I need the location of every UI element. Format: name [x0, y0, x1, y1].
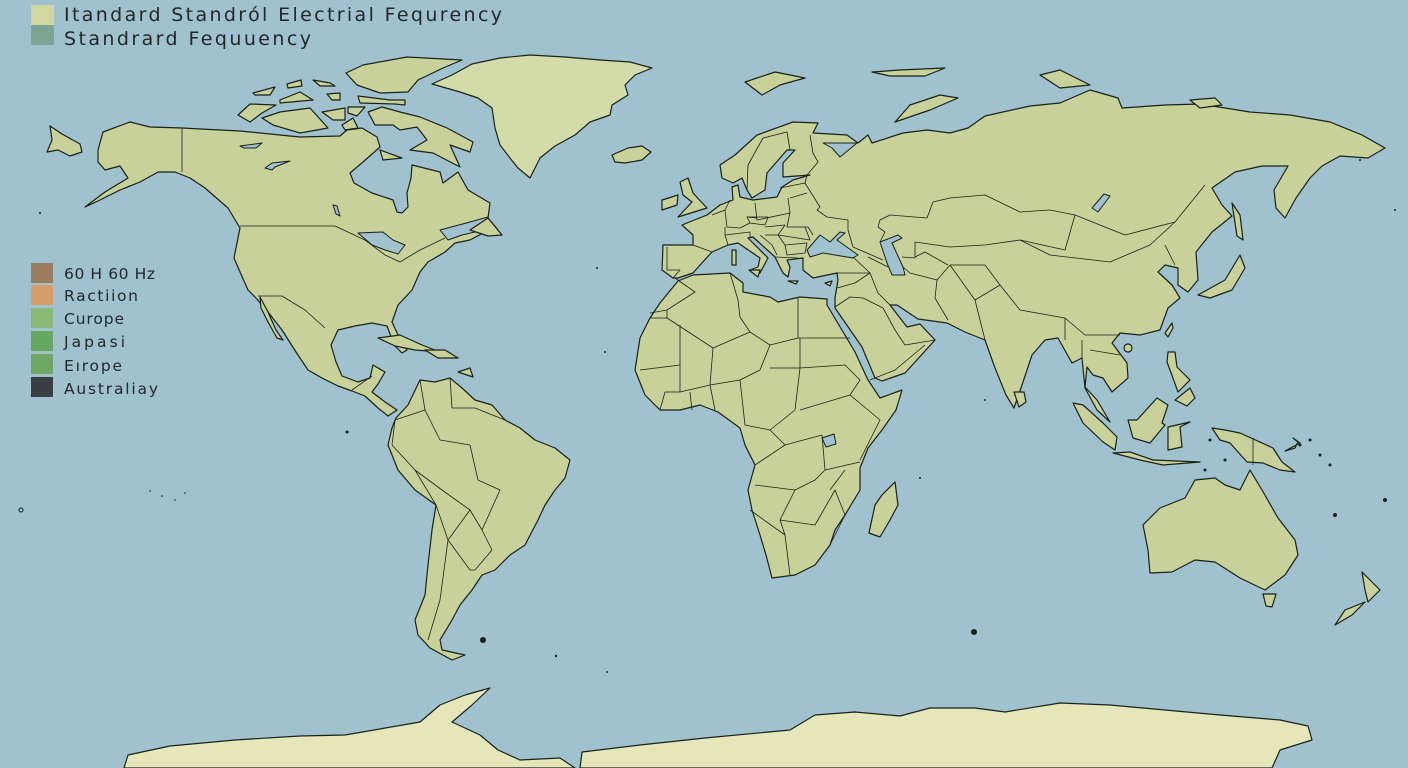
legend text line 2: Standrard Fequuency	[64, 28, 311, 50]
country borders	[182, 128, 1205, 640]
label: Japasi: Japasi	[63, 333, 125, 351]
western Alaska peninsula island	[47, 126, 82, 156]
landmass: New Zealand	[1335, 572, 1380, 625]
Caribbean islands	[378, 335, 473, 377]
swatch: 60 Hz	[31, 263, 53, 283]
water: White Sea	[823, 143, 857, 157]
label: 60 Hz: 60 H 60 Hz	[64, 265, 155, 283]
landmass: Africa	[635, 273, 902, 578]
landmass: Arctic Russia islands	[745, 68, 1222, 122]
water: Great Lakes	[358, 232, 405, 254]
landmass: North America	[85, 122, 502, 416]
swatch: Europe	[31, 354, 53, 374]
landmass: Antarctica	[124, 688, 1312, 768]
water: Black Sea	[807, 232, 858, 258]
swatch: Curope	[31, 308, 53, 328]
landmass: Japan and Sakhalin	[1198, 203, 1245, 298]
landmass: Madagascar	[869, 482, 898, 537]
legend swatch: standard frequency 2	[31, 25, 54, 45]
Arctic islands	[238, 57, 502, 236]
landmass: Australia	[1143, 470, 1298, 590]
legend: frequency regions	[31, 263, 158, 398]
legend swatch: standard frequency 1	[31, 5, 54, 25]
Mediterranean islands	[732, 250, 832, 286]
swatch: Japasi	[31, 331, 53, 351]
water: Caspian Sea	[880, 235, 905, 275]
landmass: Southeast Asia islands	[1014, 323, 1200, 465]
water: Lake Victoria	[822, 434, 836, 447]
landmass: New Guinea	[1212, 428, 1300, 472]
label: Europe: Eırope	[64, 357, 122, 375]
swatch: Australia	[31, 377, 53, 397]
legend text line 1: Itandard Standról Electrial Fequrency	[64, 4, 502, 26]
landmass: Greenland	[432, 55, 652, 178]
small islands	[19, 159, 1396, 673]
legend: top	[31, 4, 502, 50]
landmass: South America	[388, 378, 570, 660]
label: Australia: Australiay	[64, 380, 158, 398]
water: Canadian lakes	[240, 143, 340, 216]
landmass: Iceland	[612, 146, 651, 163]
water: Lake Baikal	[1092, 194, 1110, 212]
landmass: Eurasia	[662, 90, 1385, 422]
swatch: Raction	[31, 285, 53, 305]
Baja California	[260, 297, 283, 340]
label: Curope: Curope	[64, 310, 124, 328]
label: Raction: Ractiion	[64, 287, 138, 305]
landmass: Tasmania	[1263, 594, 1276, 607]
landmass: British Isles	[662, 178, 707, 217]
water: Gulf of St Lawrence	[440, 217, 490, 240]
